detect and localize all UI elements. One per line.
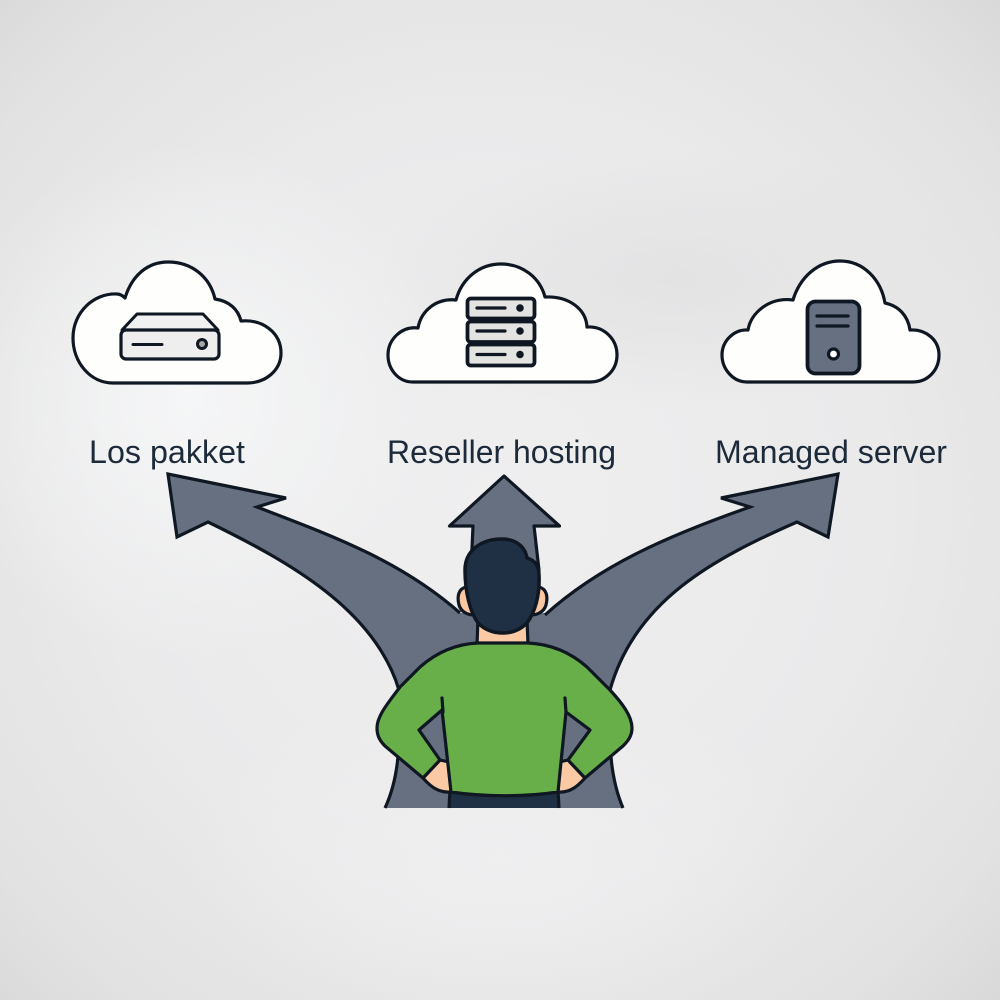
hair — [465, 539, 539, 633]
shirt fold lines — [442, 698, 566, 712]
label: Reseller hosting: Reseller hosting — [387, 434, 616, 470]
arrows — [168, 474, 838, 808]
arrow trunk fill — [385, 613, 623, 808]
icon: disk server — [121, 314, 219, 359]
left hand — [423, 760, 451, 792]
green shirt — [377, 643, 632, 796]
trousers — [449, 790, 559, 808]
arrow: center — [450, 476, 560, 570]
cloud: Los pakket — [73, 262, 281, 383]
cloud: Managed server — [722, 261, 939, 382]
neck — [477, 618, 528, 645]
arrow outlines — [168, 474, 838, 808]
cloud outline right — [722, 261, 939, 382]
icon: server rack — [468, 298, 534, 366]
cloud outline center — [388, 264, 617, 382]
arrow: right — [530, 474, 838, 700]
cloud outline left — [73, 262, 281, 383]
label: Managed server: Managed server — [715, 434, 947, 470]
trouser edges — [449, 790, 559, 808]
icon: tower server — [808, 302, 860, 374]
arrow: left — [168, 474, 480, 700]
label: Los pakket: Los pakket — [89, 434, 245, 470]
person — [377, 539, 632, 808]
ears — [458, 587, 547, 615]
cloud: Reseller hosting — [388, 264, 617, 382]
right hand — [558, 760, 585, 792]
